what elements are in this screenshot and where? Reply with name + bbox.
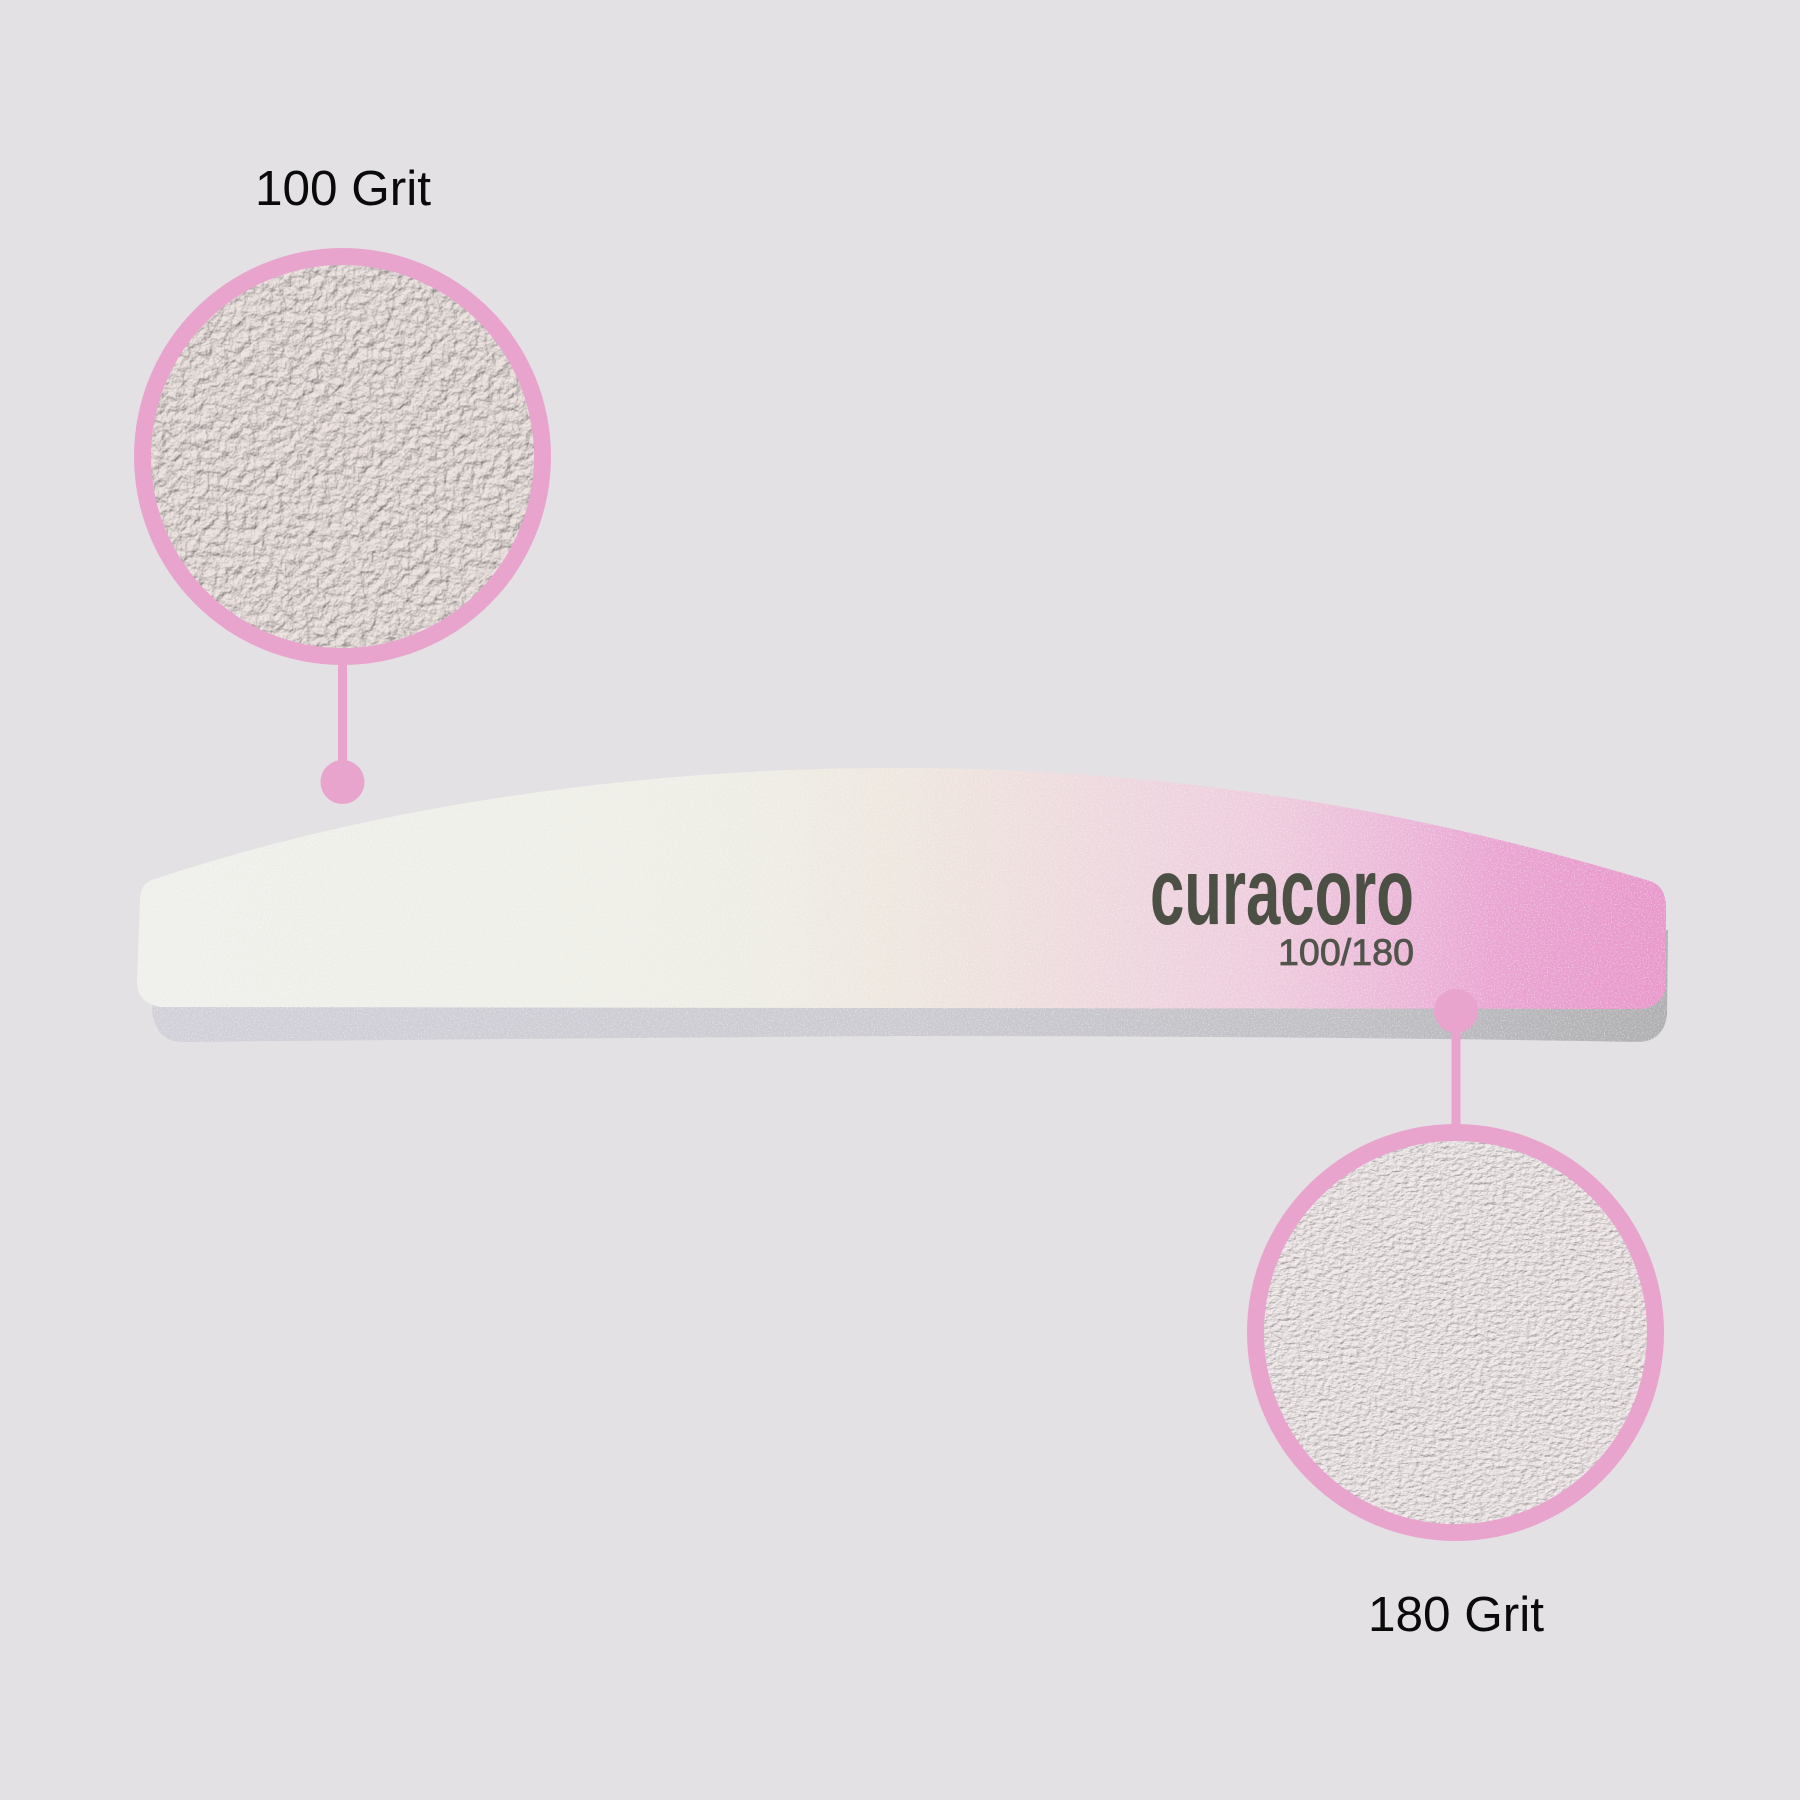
connector line and dot: 180 grit — [1434, 989, 1478, 1140]
grit marking: 100/180: 100/180 — [1278, 932, 1414, 973]
file: back layer edge — [152, 930, 1668, 1042]
brand logo: curacoro: curacoro — [1150, 839, 1414, 945]
file: front face with white-to-pink gradient — [137, 768, 1666, 1009]
magnified swatch: 180 grit texture — [1247, 1124, 1664, 1541]
magnified swatch: 100 grit texture — [134, 248, 551, 665]
callout: 180 grit — [1247, 989, 1664, 1642]
connector line and dot: 100 grit — [320, 570, 364, 804]
callout: 100 grit — [134, 161, 551, 804]
heading: 180 Grit: 180 Grit — [1368, 1587, 1544, 1642]
heading: 100 Grit: 100 Grit — [255, 161, 431, 216]
nail file — [137, 768, 1668, 1042]
